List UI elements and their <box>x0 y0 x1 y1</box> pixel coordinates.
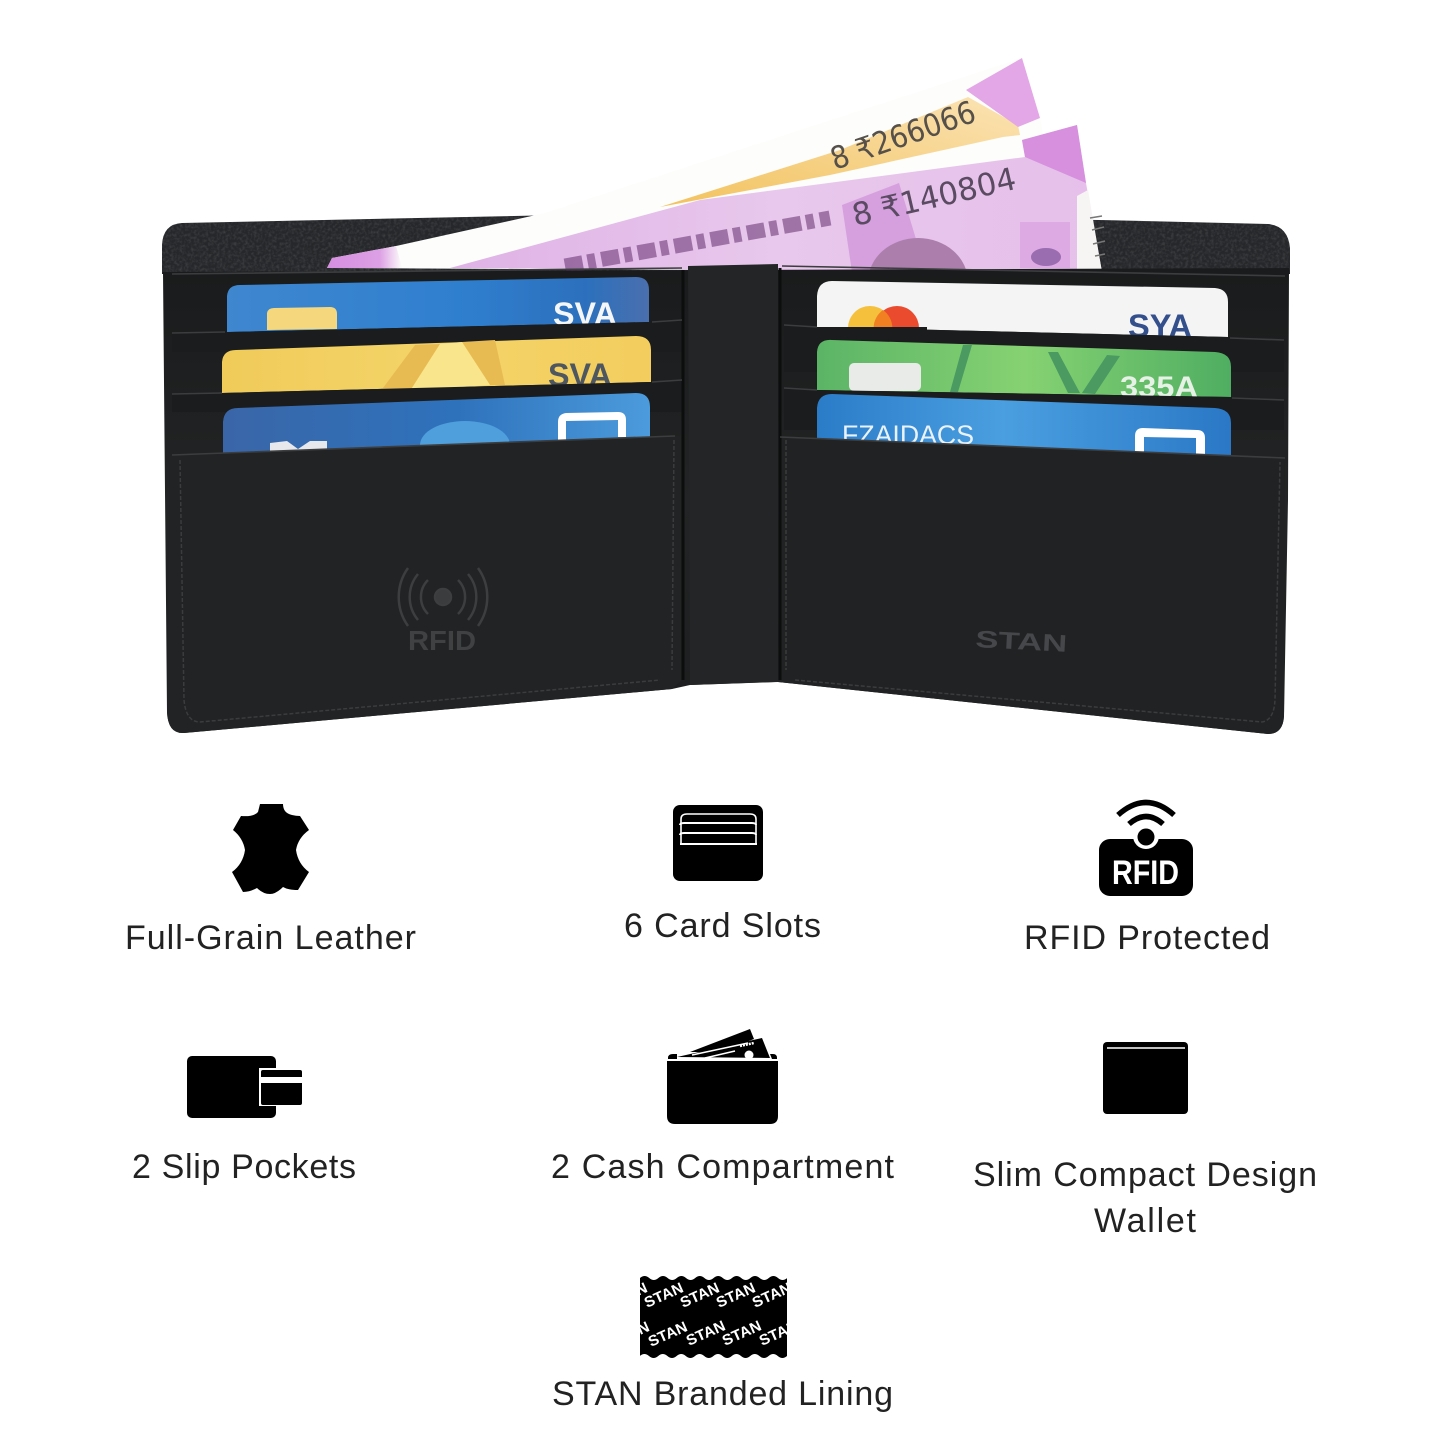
stitching <box>180 440 1280 722</box>
feature: full-grain leather <box>125 804 416 957</box>
yellow card <box>222 336 651 393</box>
green card <box>817 340 1231 397</box>
product photo: open wallet with cards and banknotes <box>160 58 1292 734</box>
feature: RFID protected <box>1024 802 1270 957</box>
label line two: Wallet <box>1094 1202 1197 1240</box>
blue FZAIDACS card <box>817 394 1231 457</box>
icon: leather hide <box>232 804 309 894</box>
white card <box>817 281 1228 337</box>
wallet back top edge <box>160 215 1292 275</box>
SVA white: SVA <box>553 296 617 332</box>
embossed STAN mark: STAN <box>975 626 1068 658</box>
front banknote <box>450 125 1102 272</box>
label: RFID Protected <box>1024 919 1270 957</box>
label: 2 Slip Pockets <box>132 1148 356 1186</box>
dark blue card <box>223 393 650 454</box>
left card stack <box>172 277 682 469</box>
FZAIDACS: FZAIDACS <box>842 420 974 450</box>
icon: wallet with cash <box>667 1029 778 1124</box>
front banknote number: 8 ₹140804 <box>849 161 1020 234</box>
SVA navy: SYA <box>1128 308 1192 344</box>
feature: STAN branded lining <box>552 1270 893 1413</box>
icon: branded lining swatch: STAN <box>608 1318 652 1351</box>
label line one: Slim Compact Design <box>973 1156 1317 1194</box>
icon: branded lining swatch: STAN <box>684 1317 728 1350</box>
icon: RFID tag with signal: RFID <box>1112 854 1179 892</box>
mastercard logo <box>848 306 919 350</box>
embossed RFID mark: RFID <box>408 625 476 656</box>
icon: branded lining swatch: STAN <box>757 1317 801 1350</box>
icon: RFID tag with signal <box>1099 802 1193 896</box>
icon: branded lining swatch <box>640 1276 787 1358</box>
wallet body <box>163 268 1289 734</box>
icon: branded lining swatch: STAN <box>646 1318 690 1351</box>
right card stack <box>784 281 1284 457</box>
blue card <box>227 277 649 332</box>
label: 2 Cash Compartment <box>551 1148 895 1186</box>
pocket strip two <box>172 380 682 412</box>
icon: wallet with card <box>187 1056 302 1118</box>
centre spine <box>688 264 778 685</box>
icon: branded lining swatch: STAN <box>714 1279 758 1312</box>
icon: branded lining swatch: STAN <box>750 1279 794 1312</box>
icon: slim wallet <box>1103 1042 1188 1114</box>
label: 6 Card Slots <box>624 907 821 945</box>
icon: card holder <box>673 805 763 881</box>
SVA grey: SVA <box>548 357 612 393</box>
icon: branded lining swatch: STAN <box>642 1279 686 1312</box>
icon: branded lining swatch: STAN <box>720 1317 764 1350</box>
335A: 335A <box>1120 371 1198 404</box>
icon: branded lining swatch: STAN <box>678 1279 722 1312</box>
rear banknote <box>327 58 1102 272</box>
pocket strip right two <box>784 388 1284 430</box>
feature: slim compact design wallet <box>973 1042 1317 1240</box>
pocket strip right one <box>784 325 1284 372</box>
pocket strip one <box>172 320 682 352</box>
label: STAN Branded Lining <box>552 1375 893 1413</box>
embossed RFID mark <box>399 568 487 656</box>
banknotes <box>327 58 1105 326</box>
rear banknote number: 8 ₹266066 <box>826 94 980 178</box>
icon: branded lining swatch: STAN <box>606 1279 650 1312</box>
feature: 2 slip pockets <box>132 1056 356 1186</box>
front slip pockets <box>167 436 682 733</box>
feature: 2 cash compartment <box>551 1029 895 1186</box>
label: Full-Grain Leather <box>125 919 416 957</box>
feature: 6 card slots <box>624 805 821 945</box>
